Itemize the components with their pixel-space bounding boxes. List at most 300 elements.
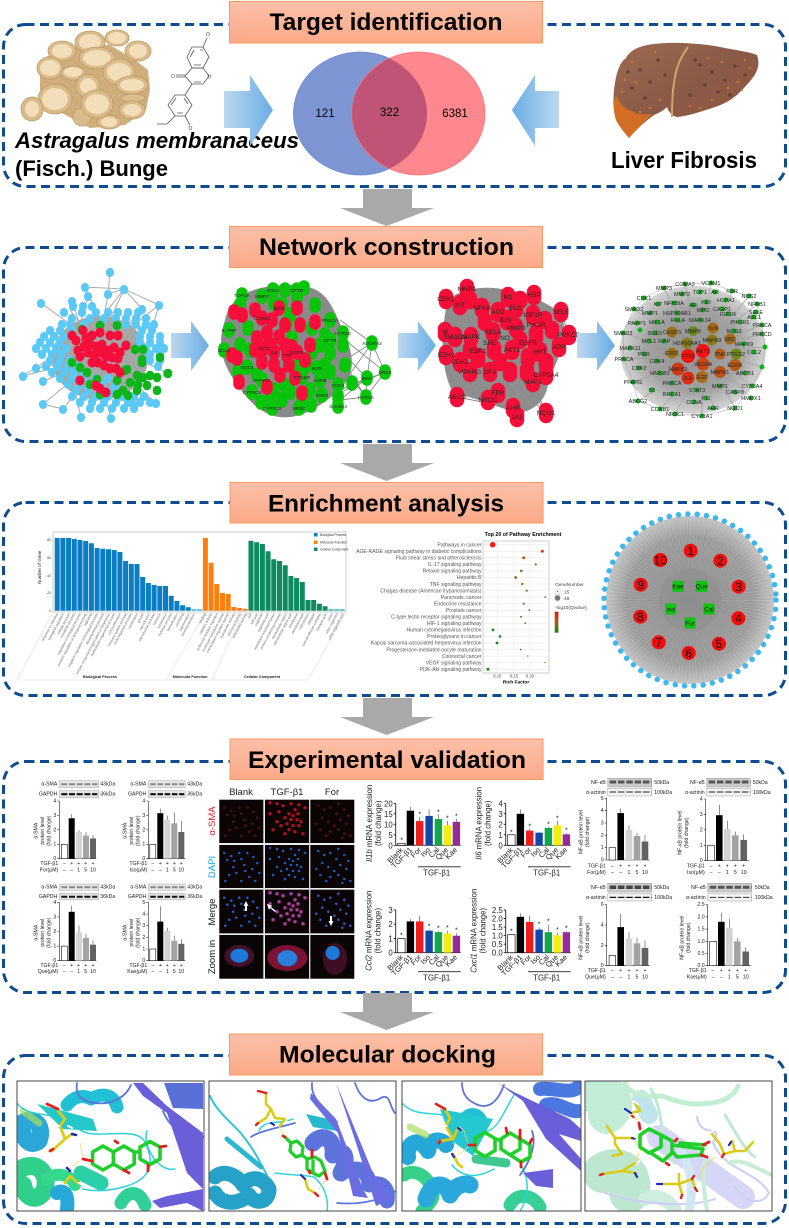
chart: Que alpha-SMA western blot: GAPDH: [39, 894, 58, 900]
chart: Que NF-kB western blot: TGF-β1: [588, 968, 606, 974]
chart: Ccl2 mRNA: Ccl2 mRNA expression: [365, 891, 374, 971]
chart: Iso NF-kB western blot: +: [742, 864, 745, 870]
chart: pathway enrichment bubble plot: Rich Factor: [503, 680, 529, 686]
chart: Iso NF-kB western blot: –: [710, 864, 713, 870]
chart: Que alpha-SMA western blot: +: [70, 963, 73, 969]
chart: GO bar chart: [17, 532, 348, 680]
chart: compound-target-pathway circular network: For: [685, 620, 696, 627]
chart: Que NF-kB western blot: +: [643, 968, 647, 974]
chart: Iso alpha-SMA western blot: –: [159, 868, 162, 874]
chart: GO bar chart: reproduction: [138, 612, 151, 631]
chart: Il1b mRNA: *: [418, 811, 421, 818]
network: hub genes ranked: MMP9: [685, 329, 701, 335]
network: herb-disease shared targets: ESR2: [316, 393, 329, 399]
chart: GO bar chart: cell killing: [175, 612, 185, 627]
chart: Que NF-kB western blot: Que(μM): [585, 975, 606, 981]
network: hub genes ranked: CCL2: [747, 350, 761, 356]
chart: For NF-kB western blot: +: [627, 864, 631, 870]
chart: For alpha-SMA western blot: –: [63, 861, 66, 867]
chart: Iso NF-kB western blot: 4: [700, 797, 703, 803]
network: hub genes ranked: HSPA1: [717, 298, 735, 304]
heading: molecular docking: [230, 1034, 542, 1075]
network: hub genes ranked: CASP8: [726, 390, 744, 396]
chart: Kae alpha-SMA western blot: +: [173, 963, 176, 969]
chart: Kae NF-kB western blot: 5: [736, 975, 739, 981]
chart: GO bar chart: organelle: [254, 612, 264, 627]
chart: Il6 mRNA: *: [510, 829, 513, 836]
heading: enrichment analysis: [230, 482, 543, 523]
chart: For alpha-SMA western blot: GAPDH: [39, 792, 58, 798]
chart: GO bar chart: extracellular region: [271, 612, 288, 640]
chart: GO bar chart: membrane-enclosed lumen: [253, 612, 276, 651]
network: hub genes ranked: CASP1: [713, 307, 731, 313]
chart: Cxcl1 mRNA: *: [565, 926, 568, 933]
chart: Que NF-kB western blot: +: [627, 968, 631, 974]
chart: Iso NF-kB western blot: α-actinin: [685, 790, 705, 796]
chart: For alpha-SMA western blot: TGF-β1: [40, 861, 58, 867]
chart: pathway enrichment bubble plot: Hepatitis B: [457, 575, 482, 581]
network: core targets red: SELE: [553, 309, 570, 316]
heading: target identification: Target identification: [270, 9, 502, 36]
chart: Cxcl1 mRNA: 1.5: [492, 923, 503, 932]
network: hub genes ranked: HSP90AB1: [663, 311, 691, 317]
chart: Kae NF-kB western blot: +: [720, 968, 723, 974]
chart: Iso alpha-SMA western blot: 3: [142, 813, 145, 819]
chart: Cxcl1 mRNA: *: [556, 927, 559, 934]
network: hub genes ranked: PIK3R1: [731, 320, 749, 326]
chart: Il1b mRNA: 15: [384, 810, 393, 819]
image: docking pose 3: [402, 1082, 580, 1210]
chart: For alpha-SMA western blot: 10: [90, 868, 96, 874]
network: hub genes ranked: AHR: [707, 406, 719, 412]
chart: pathway enrichment bubble plot: AGE-RAGE signaling pathway in diabetic complications: [356, 549, 482, 555]
chart: Il6 mRNA: Cal: [537, 845, 551, 860]
chart: GO bar chart: developmental process: [85, 612, 105, 645]
chart: Que NF-kB western blot: +: [619, 968, 622, 974]
network: hub genes ranked: CDK4: [650, 359, 664, 365]
chart: Il1b mRNA: Kae: [443, 845, 459, 861]
network: herb-disease shared targets: EGFR: [290, 350, 304, 356]
chart: For alpha-SMA western blot: 36kDa: [100, 792, 115, 798]
chart: For NF-kB western blot: NF-κB: [591, 780, 606, 786]
network: hub genes ranked: MCL1: [642, 339, 656, 345]
chart: GO bar chart: positive regulation of biological process: [57, 612, 88, 667]
chart: For alpha-SMA western blot: 1: [77, 868, 80, 874]
network: hub genes ranked: ESR1: [665, 351, 679, 357]
chart: Il1b mRNA: Iso: [419, 845, 432, 859]
chart: GO bar chart: 0: [49, 609, 51, 613]
chart: Cxcl1 mRNA: *: [547, 919, 550, 926]
network: herb-disease shared targets: BCL2: [218, 348, 230, 354]
chart: Il1b mRNA: 10: [384, 820, 393, 829]
chart: Kae NF-kB western blot: 10: [743, 975, 749, 981]
network: hub genes ranked: EGF: [696, 375, 708, 381]
chart: Il6 mRNA: 4: [498, 799, 503, 808]
network: hub genes ranked: PRKCD: [752, 332, 772, 338]
chart: Iso alpha-SMA western blot: +: [173, 861, 176, 867]
chart: Kae NF-kB western blot: 1.0: [697, 939, 705, 945]
chart: pathway enrichment bubble plot: IL-17 signaling pathway: [428, 562, 482, 568]
network: hub genes ranked: PRKCA: [753, 323, 772, 329]
panel: experimental validation: [4, 739, 786, 992]
network: hub genes ranked: HMOX1: [741, 396, 761, 402]
chart: Iso alpha-SMA western blot: 2: [142, 827, 145, 833]
chart: Iso alpha-SMA western blot: (fold change): [135, 815, 141, 846]
network: core targets red: RELA: [485, 329, 502, 336]
network: herb-disease shared targets: IL6: [271, 350, 278, 356]
chart: Kae NF-kB western blot: 50kDa: [755, 885, 770, 891]
chart: For alpha-SMA western blot: α-SMA: [41, 782, 58, 788]
chart: Cxcl1 mRNA: 1.0: [492, 932, 503, 941]
chart: GO bar chart: antioxidant activity: [231, 612, 248, 639]
network: core targets red: ESR1: [470, 348, 487, 355]
chart: GO bar chart: regulation of biological process: [56, 612, 82, 656]
icon: chemical structure: O: [208, 74, 212, 80]
chart: Ccl2 mRNA: *: [455, 928, 458, 935]
network: hub genes ranked: SMAD2: [625, 307, 643, 313]
chart: Que alpha-SMA western blot: –: [70, 969, 73, 975]
chart: For NF-kB western blot: +: [619, 864, 622, 870]
chart: Que alpha-SMA western blot: (fold change): [46, 917, 52, 948]
network: core targets red: HRT: [533, 349, 547, 356]
chart: Kae alpha-SMA western blot: 0: [142, 958, 145, 964]
chart: Kae alpha-SMA western blot: protein level: [129, 919, 135, 947]
chart: pathway enrichment bubble plot: 0.10: [493, 674, 502, 678]
network: hub genes ranked: NOS2: [742, 294, 756, 300]
chart: Iso alpha-SMA western blot: –: [151, 861, 154, 867]
arrow: herb to venn: [224, 75, 273, 146]
chart: Que alpha-SMA western blot: 5: [84, 969, 87, 975]
image grid: immunofluorescence micrographs: Merge: [207, 899, 218, 925]
network: hub genes ranked: CASP3: [663, 330, 681, 336]
chart: Iso NF-kB western blot: 0: [700, 858, 703, 864]
arrow: network step 3: [577, 321, 615, 371]
chart: GO bar chart: Biological Process: [83, 675, 117, 679]
chart: Iso NF-kB western blot: NF-κB protein level: [678, 811, 684, 855]
network: hub genes ranked: TOP1: [693, 290, 707, 296]
network: herb-disease shared targets: TOP2A: [234, 293, 251, 299]
chart: Kae NF-kB western blot: α-actinin: [686, 895, 706, 901]
network: hub genes ranked: NOS3: [727, 329, 741, 335]
chart: Kae NF-kB western blot: NF-κB: [691, 885, 706, 891]
chart: For alpha-SMA western blot: [33, 781, 115, 874]
icon: chemical structure: [157, 32, 212, 132]
network: hub genes ranked: PTGS2: [727, 352, 745, 358]
chart: Cxcl1 mRNA: (fold change): [479, 908, 488, 953]
network: hub genes ranked: PGR: [638, 352, 650, 358]
chart: Kae alpha-SMA western blot: 4: [142, 912, 145, 918]
chart: GO bar chart: Molecular Function: [173, 675, 208, 679]
chart: compound-target-pathway circular network: 5: [716, 637, 723, 651]
network: core targets red: SRC: [483, 340, 497, 347]
network: core targets red: JUN: [499, 317, 512, 324]
image: docking pose 4: [586, 1082, 772, 1210]
chart: For NF-kB western blot: 5: [636, 870, 639, 876]
chart: For alpha-SMA western blot: 2: [53, 827, 56, 833]
chart: Iso NF-kB western blot: –: [718, 870, 721, 876]
chart: Il6 mRNA: (fold change): [484, 800, 493, 846]
chart: Que alpha-SMA western blot: +: [91, 963, 95, 969]
heading: target identification: [230, 2, 542, 43]
chart: Kae NF-kB western blot: NF-κB protein level: [680, 916, 686, 960]
chart: GO bar chart: cellular component organization or biogenesis: [75, 612, 111, 675]
network: herb-disease shared targets: CDK4: [332, 383, 345, 389]
network: herb-disease shared targets: PTGER: [294, 375, 311, 381]
chart: Que NF-kB western blot: –: [619, 975, 622, 981]
chart: Kae alpha-SMA western blot: Kae(μM): [127, 969, 148, 975]
chart: Kae alpha-SMA western blot: (fold change): [135, 917, 141, 948]
chart: Cxcl1 mRNA: 2.0: [492, 915, 503, 924]
chart: For NF-kB western blot: [579, 778, 672, 876]
chart: compound-target-pathway circular network: 8: [637, 610, 644, 624]
network: hub genes ranked: MMP3: [656, 286, 672, 292]
network: core targets red: ABCG: [448, 394, 466, 401]
chart: Il6 mRNA: Iso: [529, 845, 542, 859]
chart: pathway enrichment bubble plot: Proteoglycans in cancer: [427, 634, 482, 640]
chart: GO bar chart: 60: [47, 556, 51, 560]
chart: Ccl2 mRNA: (fold change): [374, 908, 383, 953]
chart: Que alpha-SMA western blot: α-SMA: [33, 924, 39, 941]
chart: Iso alpha-SMA western blot: 4: [142, 799, 145, 805]
image grid: immunofluorescence micrographs: [207, 787, 354, 979]
chart: Que NF-kB western blot: (fold change): [585, 922, 591, 953]
chart: Il1b mRNA: *: [455, 813, 458, 820]
chart: Ccl2 mRNA: *: [446, 925, 449, 932]
chart: Que alpha-SMA western blot: 43kDa: [100, 885, 115, 891]
chart: Ccl2 mRNA: Iso: [419, 953, 432, 966]
chart: GO bar chart: structural activity: [226, 612, 242, 637]
chart: Cxcl1 mRNA: TGF-β1: [533, 974, 560, 983]
chart: For NF-kB western blot: α-actinin: [586, 790, 606, 796]
network: hub genes ranked: BRCA1: [663, 392, 681, 398]
network: hub genes ranked: CCNB1: [651, 407, 669, 413]
chart: GO bar chart: protein-containing complex: [259, 612, 282, 650]
chart: pathway enrichment bubble plot: Chagas disease (American trypanosomiasis): [380, 588, 482, 594]
chart: Que NF-kB western blot: 50kDa: [654, 885, 669, 891]
chart: Que alpha-SMA western blot: 4: [53, 900, 56, 906]
network: core targets red: NFKB: [473, 305, 491, 312]
chart: Que alpha-SMA western blot: +: [77, 963, 80, 969]
chart: pathway enrichment bubble plot: C-type lectin receptor signaling pathway: [391, 614, 482, 620]
chart: compound-target-pathway circular network: Cal: [704, 606, 714, 613]
chart: Que NF-kB western blot: α-actinin: [586, 895, 606, 901]
arrow: gray down 2: [340, 444, 434, 481]
chart: pathway enrichment bubble plot: 0.20: [526, 674, 535, 678]
chart: GO bar chart: signaling: [83, 612, 93, 626]
chart: Il1b mRNA: Cal: [427, 845, 441, 860]
chart: Iso NF-kB western blot: 2: [700, 827, 703, 833]
chart: For NF-kB western blot: 10: [642, 870, 648, 876]
chart: GO bar chart: Cellular Component: [320, 548, 348, 552]
network: hub genes ranked: MAPK1: [711, 370, 729, 376]
chart: GO bar chart: synapse: [306, 613, 316, 626]
chart: Il6 mRNA: Que: [544, 845, 560, 862]
network: hub genes ranked: MAPK14: [689, 318, 711, 324]
chart: pathway enrichment bubble plot: Top 20 of Pathway Enrichment: [485, 532, 562, 538]
chart: Iso NF-kB western blot: +: [718, 864, 721, 870]
network: hub genes ranked: SMAD3: [614, 331, 632, 337]
chart: For NF-kB western blot: 2: [601, 833, 604, 839]
chart: Que alpha-SMA western blot: Que(μM): [38, 969, 59, 975]
chart: pathway enrichment bubble plot: TNF signaling pathway: [430, 582, 482, 588]
chart: Cxcl1 mRNA: 0.0: [492, 949, 503, 958]
chart: Il6 mRNA: *: [565, 827, 568, 834]
chart: Kae NF-kB western blot: 2.0: [697, 914, 705, 920]
network: hub genes ranked: CYP3A4: [741, 384, 763, 390]
heading: network construction: [230, 226, 542, 268]
chart: Il6 mRNA: Blank: [495, 845, 515, 865]
network: herb-disease shared targets: DRD4: [378, 370, 392, 376]
chart: pathway enrichment bubble plot: 48: [564, 596, 570, 602]
network: hub genes ranked: MAPK3: [669, 367, 687, 373]
image: docking pose 2: [210, 1082, 396, 1210]
chart: GO bar chart: immune system process: [107, 612, 128, 647]
network: herb-disease shared targets: MAP: [362, 376, 372, 382]
network: core targets red: PIK3R: [527, 322, 546, 329]
network: hub genes ranked: MMP1: [712, 384, 728, 390]
network: core targets red: CDK1: [437, 296, 455, 303]
network: core targets red: AHR: [506, 405, 520, 412]
chart: compound-target-pathway circular network: Kae: [672, 584, 684, 591]
chart: Kae alpha-SMA western blot: 36kDa: [187, 894, 202, 900]
chart: Il1b mRNA: 5: [388, 831, 393, 840]
network: core targets red: NO: [500, 335, 510, 342]
chart: Il6 mRNA: 2: [498, 820, 503, 829]
chart: Iso NF-kB western blot: Iso(μM): [687, 870, 705, 876]
chart: Que alpha-SMA western blot: 2: [53, 929, 56, 935]
network: core targets red: KIT: [455, 302, 465, 309]
image grid: immunofluorescence micrographs: Zoom in: [207, 940, 218, 974]
network: hub genes ranked: PRKCA: [663, 381, 682, 387]
icon: chemical structure: O: [188, 126, 192, 132]
network: core targets red: FLO: [510, 305, 522, 312]
chart: For alpha-SMA western blot: protein level: [40, 817, 46, 845]
network: core targets red: 1A1: [511, 414, 523, 421]
network: hub genes ranked: [614, 281, 772, 420]
chart: Kae NF-kB western blot: +: [736, 968, 739, 974]
chart: For alpha-SMA western blot: +: [77, 861, 80, 867]
image grid: immunofluorescence micrographs: Blank: [229, 787, 253, 798]
chart: Kae NF-kB western blot: Kae(μM): [687, 975, 707, 981]
network: hub genes ranked: MAPK11: [619, 346, 641, 352]
chart: compound-target-pathway circular network: 9: [637, 578, 644, 592]
chart: GO bar chart: Cellular Component: [244, 675, 281, 679]
heading: network construction: Network construction: [259, 234, 514, 261]
chart: pathway enrichment bubble plot: HIF-1 signaling pathway: [427, 621, 482, 627]
chart: Iso alpha-SMA western blot: 0: [142, 856, 145, 862]
chart: pathway enrichment bubble plot: Colorectal cancer: [442, 654, 482, 660]
network: herb-disease shared targets: CYP2C9: [263, 406, 282, 412]
chart: Kae NF-kB western blot: [680, 883, 773, 981]
network: hub genes ranked: NQO1: [727, 406, 743, 412]
chart: Il1b mRNA: For: [409, 845, 423, 860]
chart: Kae alpha-SMA western blot: +: [166, 963, 169, 969]
chart: For NF-kB western blot: –: [611, 870, 614, 876]
network: hub genes ranked: VCAM1: [702, 281, 720, 287]
image grid: immunofluorescence micrographs: DAPI: [207, 856, 218, 878]
chart: For NF-kB western blot: For(μM): [587, 870, 606, 876]
network: core targets red: SP3: [484, 369, 497, 376]
chart: compound-target-pathway circular network: 7: [655, 636, 662, 650]
chart: Iso alpha-SMA western blot: 36kDa: [187, 792, 202, 798]
chart: pathway enrichment bubble plot: Pathways in cancer: [437, 542, 482, 548]
chart: Ccl2 mRNA: *: [437, 926, 440, 933]
chart: For NF-kB western blot: 1: [628, 870, 631, 876]
chart: Cxcl1 mRNA: Blank: [495, 953, 515, 972]
chart: For alpha-SMA western blot: 5: [84, 868, 87, 874]
chart: For NF-kB western blot: 100kDa: [654, 790, 672, 796]
heading: enrichment analysis: Enrichment analysis: [268, 490, 504, 518]
chart: Il6 mRNA: [475, 787, 571, 877]
chart: Il1b mRNA: Il1b mRNA expression: [365, 785, 374, 862]
chart: Que alpha-SMA western blot: –: [63, 969, 66, 975]
network: herb-disease shared targets: ADRB: [313, 378, 327, 384]
chart: GO bar chart: membrane: [288, 613, 299, 629]
network: hub genes ranked: TNF: [715, 352, 726, 358]
network: core targets red: CDK2: [451, 359, 469, 366]
network: core targets red: AO2: [491, 309, 505, 316]
chart: Ccl2 mRNA: For: [409, 952, 423, 967]
chart: Kae alpha-SMA western blot: GAPDH: [128, 894, 147, 900]
chart: GO bar chart: 20: [47, 591, 51, 595]
chart: GO bar chart: multicellular organismal process: [90, 612, 116, 657]
chart: venn diagram: [294, 52, 485, 175]
network: core targets red: M1: [503, 294, 513, 301]
chart: Ccl2 mRNA: Que: [434, 953, 450, 969]
chart: Iso NF-kB western blot: TGF-β1: [687, 864, 705, 870]
chart: Iso alpha-SMA western blot: +: [166, 861, 169, 867]
network: herb-disease shared targets: NOX4: [240, 365, 254, 371]
chart: pathway enrichment bubble plot: Relaxin signaling pathway: [423, 569, 482, 575]
chart: pathway enrichment bubble plot: -log10(Qvalue): [555, 605, 587, 611]
chart: Il6 mRNA: 3: [498, 810, 503, 819]
heading: experimental validation: [230, 739, 543, 780]
chart: Ccl2 mRNA: 2: [388, 920, 393, 929]
chart: Cxcl1 mRNA: TGF-β1: [499, 953, 524, 977]
chart: compound-target-pathway circular network: 10: [654, 553, 667, 567]
chart: Ccl2 mRNA: 3: [388, 906, 393, 915]
chart: Il1b mRNA: [365, 785, 461, 877]
chart: Kae NF-kB western blot: +: [728, 968, 731, 974]
chart: Il6 mRNA: TGF-β1: [499, 845, 524, 870]
chart: For NF-kB western blot: 5: [601, 796, 604, 802]
chart: For NF-kB western blot: 3: [601, 820, 604, 826]
chart: Iso alpha-SMA western blot: protein level: [129, 817, 135, 845]
chart: Iso NF-kB western blot: 1: [726, 870, 729, 876]
chart: Kae NF-kB western blot: 100kDa: [755, 895, 773, 901]
chart: Il1b mRNA: *: [446, 815, 449, 822]
chart: GO bar chart: detoxification: [166, 612, 179, 632]
chart: For alpha-SMA western blot: +: [91, 861, 95, 867]
network: core targets red: MMP1: [458, 286, 477, 293]
chart: Iso alpha-SMA western blot: TGF-β1: [129, 861, 147, 867]
chart: For alpha-SMA western blot: 3: [53, 813, 56, 819]
chart: pathway enrichment bubble plot: Human cytomegalovirus infection: [406, 628, 482, 634]
network: hub genes ranked: AKT1: [696, 349, 710, 355]
chart: Kae NF-kB western blot: TGF-β1: [689, 968, 707, 974]
chart: GO bar chart: biological regulation: [47, 613, 65, 641]
text: liver fibrosis: Liver Fibrosis: [611, 147, 757, 173]
network: core targets red: MAPK: [462, 334, 481, 341]
network: herb-disease shared targets: IKZK: [312, 366, 323, 372]
arrow: gray down 3: [340, 698, 434, 735]
chart: GO bar chart: molecular transducer activity: [201, 612, 225, 652]
chart: GO bar chart: Number of Gene: [37, 550, 42, 584]
chart: Que NF-kB western blot: 5: [636, 975, 639, 981]
chart: GO bar chart: behavior: [152, 612, 162, 626]
chart: Il1b mRNA: (fold change): [374, 800, 383, 846]
panel borders: docking image frames: [17, 1081, 772, 1211]
